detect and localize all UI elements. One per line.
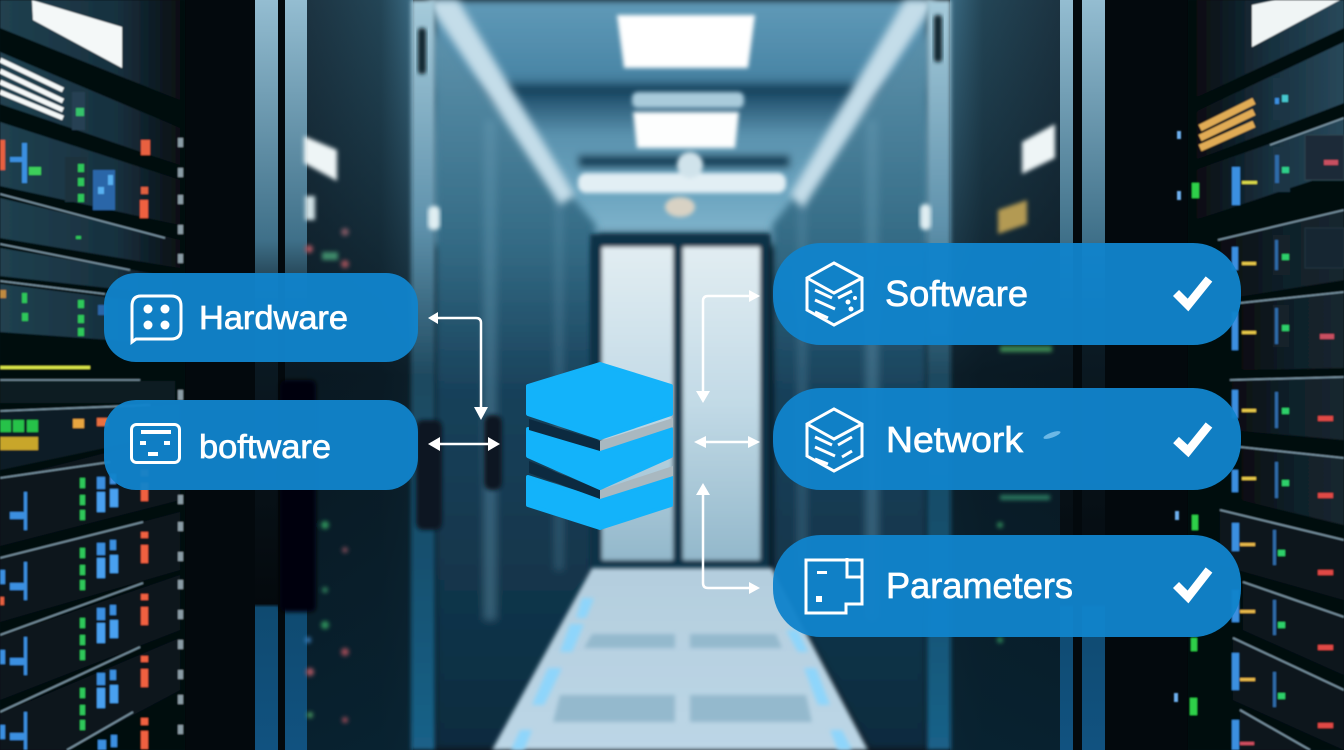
icon: check <box>1176 425 1209 451</box>
rack row 2 <box>0 532 148 605</box>
label: Network: Network <box>886 419 1024 460</box>
label: Hardware: Hardware <box>199 300 348 337</box>
label: Parameters: Parameters <box>886 565 1073 606</box>
arrow: stack to software <box>696 290 760 403</box>
ceiling light panels <box>578 15 786 217</box>
left server rack <box>0 0 185 750</box>
icon: parameters sheet <box>806 558 862 613</box>
arrow: software to stack <box>428 437 500 451</box>
arrow: hardware to stack <box>428 312 488 420</box>
label: Software: Software <box>885 273 1028 314</box>
right server rack <box>1174 0 1344 750</box>
panel: Hardware <box>104 273 418 362</box>
icon: central stack <box>528 364 673 528</box>
decorative glint <box>1043 430 1061 440</box>
panel: Network <box>773 388 1241 490</box>
rack row 4 <box>0 656 148 750</box>
panel: Parameters <box>773 535 1241 637</box>
corridor floor <box>492 568 868 750</box>
panel: Software <box>773 243 1241 345</box>
mid cabinets <box>434 30 928 750</box>
rack row 1 <box>10 470 148 530</box>
far doors <box>590 234 770 570</box>
icon: software box <box>807 263 862 325</box>
rack row 3 <box>0 594 148 675</box>
rack display panels <box>0 0 122 118</box>
right rack status lights <box>1174 135 1344 750</box>
right rack display panels <box>1177 0 1340 200</box>
near-left cabinet <box>255 0 502 750</box>
icon: hardware chip <box>132 296 181 342</box>
ceiling beams <box>426 0 936 208</box>
arrow: stack to parameters <box>696 483 760 594</box>
arrow: stack to network <box>694 436 760 448</box>
icon: network box <box>807 409 862 471</box>
panel: boftware <box>104 400 418 490</box>
rack status lights <box>0 92 150 450</box>
icon: software window <box>132 424 180 462</box>
corridor ceiling <box>434 0 928 245</box>
near-right cabinet <box>920 0 1105 750</box>
icon: check <box>1176 570 1209 597</box>
label: boftware: boftware <box>199 429 331 466</box>
icon: check <box>1176 279 1209 305</box>
